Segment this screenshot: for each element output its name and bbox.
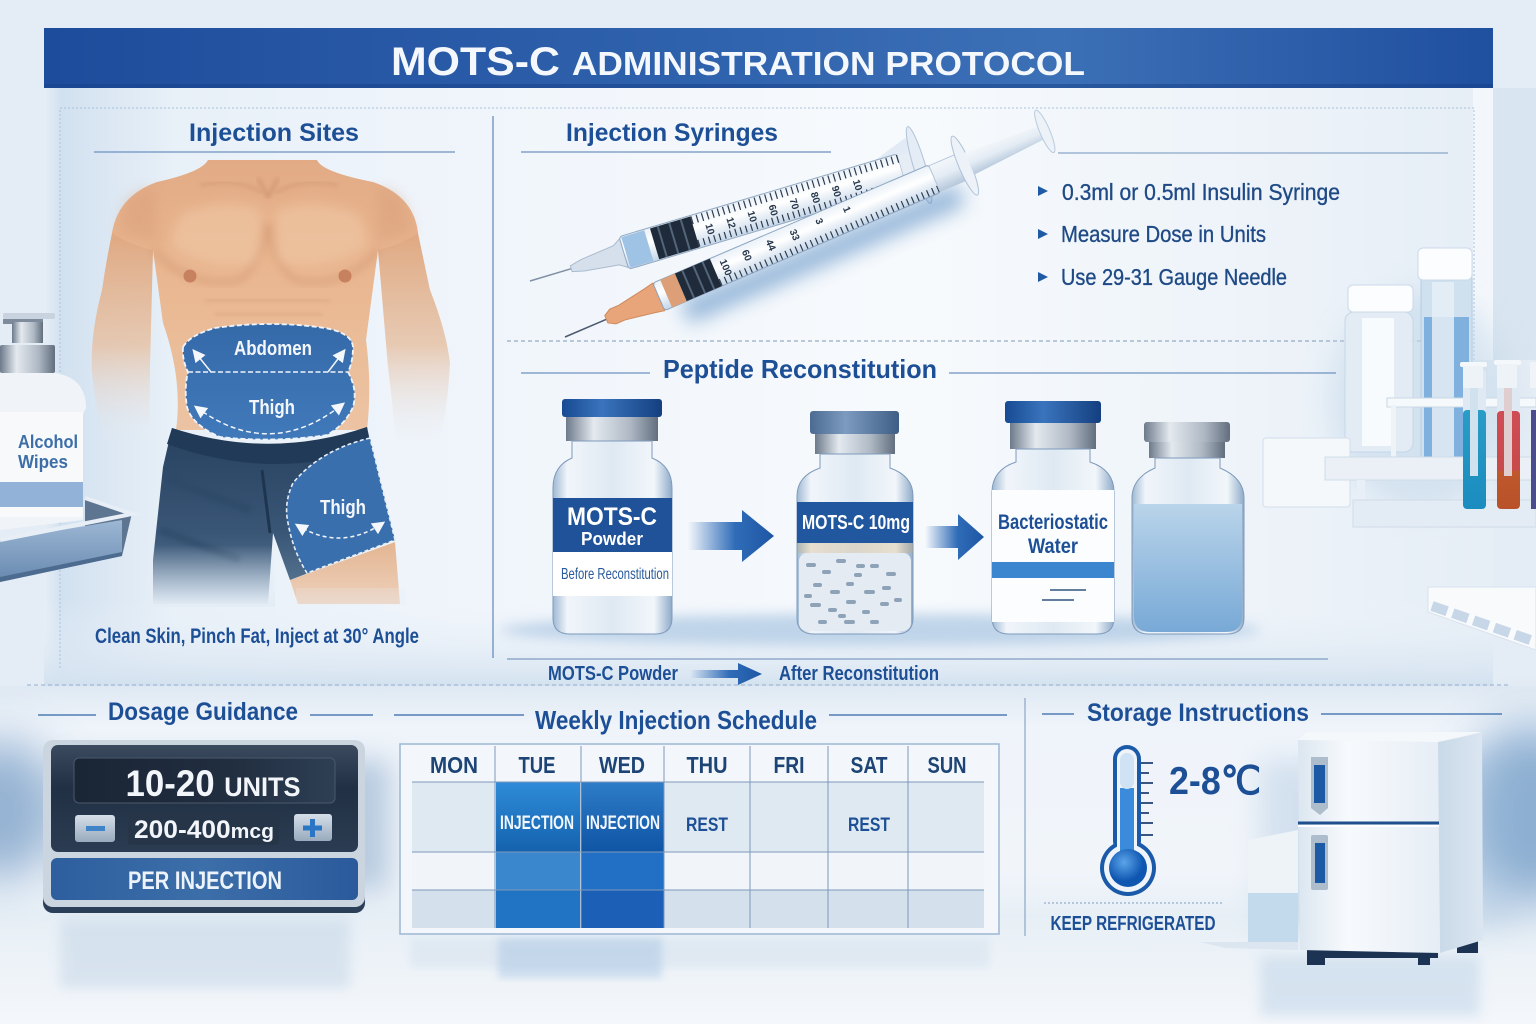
shorts — [153, 427, 395, 604]
heading: dosage guidance: Dosage Guidance — [108, 698, 298, 726]
syringe back: 80 — [808, 191, 822, 205]
vial: reconstituted solution — [1132, 422, 1244, 634]
flow caption — [548, 663, 939, 685]
heading: injection syringes: Injection Syringes — [566, 119, 778, 147]
syringe front: 1 — [840, 205, 852, 215]
panel: injection syringes — [519, 100, 1448, 366]
weekday headers: TUE — [518, 752, 556, 778]
body figure — [92, 160, 450, 607]
syringe bullet list: Use 29-31 Gauge Needle — [1061, 264, 1287, 290]
vial: bacteriostatic water — [992, 401, 1114, 634]
alcohol wipes bottle and tray: Wipes — [18, 452, 68, 472]
dose units: 10-20 UNITS — [126, 763, 300, 804]
panel: weekly schedule — [394, 705, 1007, 934]
white tray lower right — [1428, 587, 1536, 650]
small container by fridge — [1200, 830, 1298, 950]
test tube red — [1494, 360, 1521, 509]
syringe bullet list: 0.3ml or 0.5ml Insulin Syringe — [1062, 179, 1340, 205]
lower section background — [0, 685, 1536, 1024]
weekday headers: SAT — [850, 752, 888, 778]
flow caption: After Reconstitution — [779, 663, 939, 685]
icon: refrigerator — [1298, 732, 1483, 965]
weekday headers — [430, 752, 966, 778]
syringe front: 3 — [812, 217, 825, 227]
test tube third — [1530, 362, 1536, 509]
vial: bacteriostatic water: Water — [1028, 535, 1078, 558]
syringe shadow — [681, 184, 965, 323]
vial: MOTS-C powder: Powder — [581, 529, 643, 549]
syringe back plunger — [846, 138, 920, 182]
heading: storage instructions: Storage Instructions — [1087, 699, 1309, 727]
alcohol wipes bottle and tray — [0, 313, 132, 582]
panel: injection sites — [92, 119, 455, 648]
syringe back: 90 — [829, 185, 843, 199]
vial: MOTS-C 10mg — [797, 411, 913, 634]
arrows on the patches — [194, 351, 383, 538]
label: abdomen: Abdomen — [234, 338, 312, 360]
thigh patch on shorts — [287, 438, 395, 573]
schedule cells: REST — [686, 815, 728, 836]
syringe back: 10 — [850, 178, 864, 193]
syringe bullet list — [1038, 179, 1340, 290]
panel: peptide reconstitution — [500, 354, 1336, 685]
label: thigh centre: Thigh — [249, 397, 295, 419]
title: MOTS-C ADMINISTRATION PROTOCOL — [391, 40, 1085, 84]
syringe front: 100 — [717, 258, 734, 278]
muscle shading — [153, 225, 268, 282]
dose mcg: 200-400mcg — [134, 816, 274, 844]
vial: MOTS-C powder: MOTS-C — [567, 503, 657, 531]
per injection: PER INJECTION — [128, 867, 282, 895]
panel: dosage guidance — [38, 698, 373, 913]
weekday headers: FRI — [774, 752, 804, 778]
dosage display device — [43, 740, 365, 913]
weekday headers: WED — [599, 752, 645, 778]
abdomen patch — [183, 324, 355, 440]
weekday headers: SUN — [928, 752, 966, 778]
heading: peptide reconstitution: Peptide Reconstitution — [663, 354, 937, 384]
syringe front: 44 — [763, 238, 777, 253]
schedule cells: INJECTION — [500, 813, 574, 834]
right leg skin — [290, 542, 400, 604]
icon: thermometer — [1100, 745, 1156, 896]
schedule cells — [500, 813, 890, 836]
arms — [92, 182, 157, 440]
title banner — [44, 28, 1493, 88]
syringe front: 33 — [787, 228, 801, 243]
flow caption: MOTS-C Powder — [548, 663, 678, 685]
vial: MOTS-C 10mg: MOTS-C 10mg — [802, 512, 910, 534]
keep refrigerated: KEEP REFRIGERATED — [1050, 913, 1216, 935]
bottle label: Alcohol — [18, 432, 78, 452]
bottom fade — [145, 545, 275, 607]
vial: MOTS-C powder: Before Reconstitution — [561, 566, 669, 583]
schedule cells: INJECTION — [586, 813, 660, 834]
syringe front: 60 — [739, 248, 754, 263]
vial: bacteriostatic water: Bacteriostatic — [998, 511, 1108, 534]
torso — [112, 160, 418, 430]
arrow 1 — [688, 510, 774, 562]
syringe back: 12 — [723, 216, 737, 230]
vial: MOTS-C powder — [553, 399, 672, 634]
table shadow — [500, 614, 1260, 646]
weekday headers: MON — [430, 752, 478, 778]
test tube blue — [1460, 362, 1487, 509]
syringe bullet list: Measure Dose in Units — [1061, 221, 1266, 247]
schedule cells: REST — [848, 815, 890, 836]
heading: weekly schedule: Weekly Injection Schedule — [535, 705, 817, 735]
main panel — [44, 88, 1493, 688]
syringe back — [519, 125, 936, 319]
arrow 2 — [925, 514, 984, 560]
caption: injection technique: Clean Skin, Pinch Fat, Inject at 30° Angle — [95, 625, 419, 648]
temperature: 2-8℃ — [1169, 760, 1261, 803]
label: thigh right: Thigh — [320, 497, 366, 519]
syringe back: 60 — [766, 203, 779, 218]
background lab decor: bottles and test tubes — [1263, 248, 1536, 650]
syringe back: 70 — [787, 197, 800, 211]
syringe back: 10 — [702, 222, 716, 237]
panel dividers — [493, 116, 1450, 658]
weekday headers: THU — [686, 752, 728, 778]
heading: injection sites: Injection Sites — [189, 119, 359, 147]
syringe back: 10 — [744, 210, 758, 224]
schedule table — [400, 744, 999, 934]
panel: storage instructions — [1025, 698, 1502, 965]
syringe front — [552, 100, 1062, 366]
